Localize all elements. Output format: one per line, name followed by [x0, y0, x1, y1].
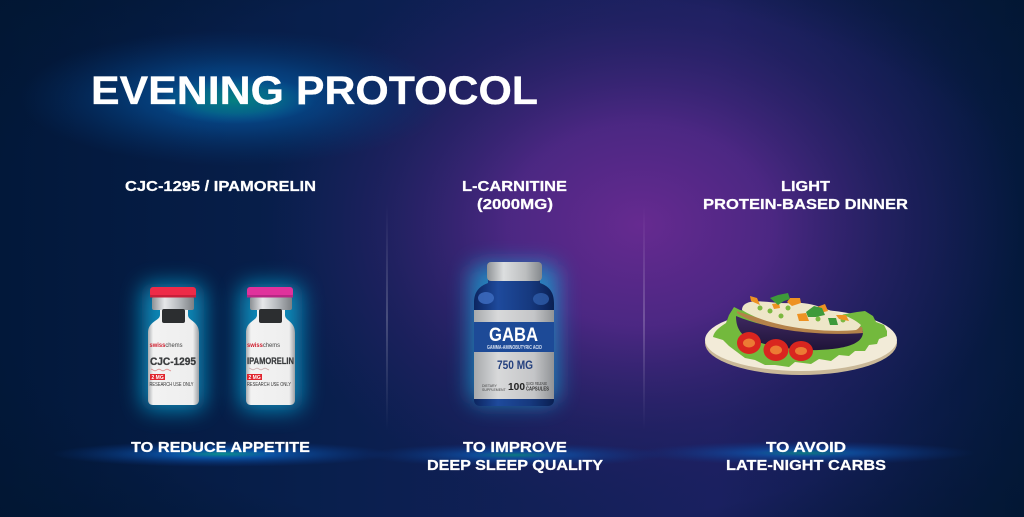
heading: dinner [703, 179, 909, 213]
icon: Ipamorelin vial: swisschems [247, 342, 281, 349]
bottom glow streaks [52, 441, 975, 467]
icon: GABA bottle: 100 [508, 381, 525, 393]
panel: Light protein-based dinner [703, 179, 909, 474]
heading: dinner: PROTEIN-BASED DINNER [703, 197, 909, 213]
icon: bottle glow [470, 264, 558, 404]
icon: GABA bottle: DIETARY [482, 384, 498, 388]
heading: L-Carnitine: L-CARNITINE [462, 179, 567, 195]
icon: GABA bottle: 750 MG [497, 358, 533, 372]
icon: GABA bottle: GABA [489, 325, 538, 346]
icon: plate of stuffed eggplant [705, 293, 897, 375]
icon: Ipamorelin vial: RESEARCH USE ONLY [247, 382, 291, 388]
icon: CJC-1295 vial: swisschems [150, 342, 183, 349]
title: EVENING PROTOCOL [91, 69, 538, 113]
heading: L-Carnitine [462, 179, 567, 213]
icon: Ipamorelin vial: IPAMORELIN [247, 356, 294, 367]
lettuce [713, 307, 887, 367]
icon: GABA bottle: CAPSULES [526, 386, 549, 392]
panel: CJC-1295 / Ipamorelin [125, 179, 316, 456]
icon: GABA bottle: GAMMA-AMINOBUTYRIC ACID [487, 345, 542, 351]
caption: to reduce appetite: TO REDUCE APPETITE [131, 440, 310, 456]
icon: Ipamorelin vial: 2 MG [248, 375, 261, 381]
icon: vial glow right [240, 284, 302, 410]
caption: avoid late-night carbs: LATE-NIGHT CARBS [726, 458, 886, 474]
caption: avoid late-night carbs [726, 440, 886, 474]
stuffing [742, 301, 861, 331]
title glow [20, 30, 450, 166]
icon: Ipamorelin vial [246, 287, 295, 405]
icon: GABA bottle: SUPPLEMENT [482, 388, 507, 392]
caption: improve deep sleep: TO IMPROVE [463, 440, 567, 456]
icon: CJC-1295 vial: 2 MG [152, 375, 164, 381]
icon: CJC-1295 vial [148, 287, 199, 405]
caption: improve deep sleep: DEEP SLEEP QUALITY [427, 458, 603, 474]
heading: L-Carnitine: (2000MG) [477, 197, 553, 213]
heading: CJC-1295 / Ipamorelin: CJC-1295 / IPAMORELIN [125, 179, 316, 195]
heading: dinner: LIGHT [781, 179, 830, 195]
caption: avoid late-night carbs: TO AVOID [766, 440, 846, 456]
icon: vial glow left [142, 284, 204, 410]
caption: improve deep sleep [427, 440, 603, 474]
column dividers [386, 205, 644, 430]
icon: CJC-1295 vial: CJC-1295 [150, 356, 196, 368]
icon: GABA bottle [474, 262, 554, 406]
icon: CJC-1295 vial: RESEARCH USE ONLY [150, 382, 194, 388]
icon: GABA bottle: QUICK RELEASE [526, 381, 547, 386]
tomatoes [737, 332, 813, 361]
eggplant [736, 316, 863, 350]
panel: L-Carnitine [427, 179, 603, 474]
